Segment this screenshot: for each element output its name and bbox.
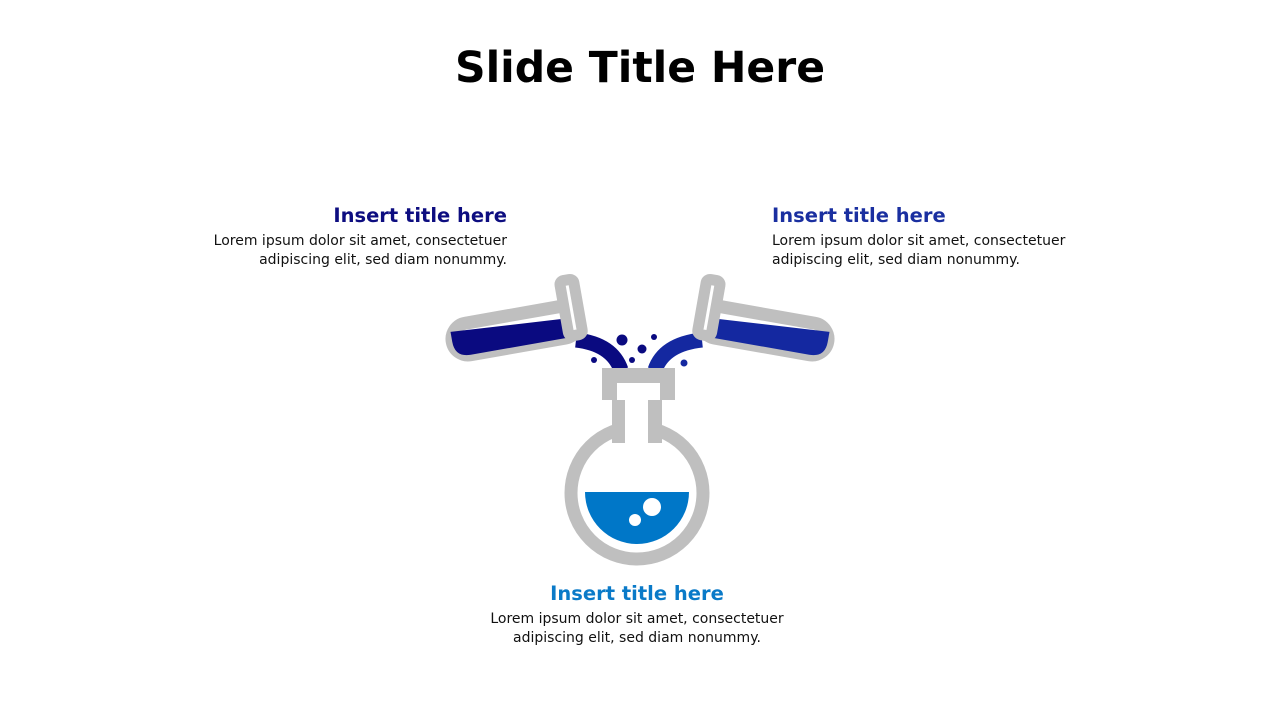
flask: [571, 368, 703, 559]
text block: right: [772, 204, 1066, 268]
text block: left: Lorem ipsum dolor sit amet, consectetuer: [214, 233, 507, 249]
text block: bottom: adipiscing elit, sed diam nonummy.: [513, 630, 761, 646]
tube: left: [445, 279, 583, 358]
text block: bottom: Lorem ipsum dolor sit amet, consectetuer: [490, 611, 784, 627]
text block: left: adipiscing elit, sed diam nonummy.: [259, 252, 507, 268]
stream: left: [576, 340, 621, 370]
text block: left: [214, 204, 507, 268]
text block: bottom: Insert title here: [550, 582, 724, 605]
text block: right: adipiscing elit, sed diam nonummy.: [772, 252, 1020, 268]
bubbles: [591, 334, 688, 366]
flask liquid: [585, 492, 689, 544]
tube: right: [697, 279, 835, 358]
text block: right: Lorem ipsum dolor sit amet, consectetuer: [772, 233, 1065, 249]
text block: bottom: [490, 582, 784, 646]
text block: left: Insert title here: [333, 204, 507, 227]
stream: right: [655, 340, 702, 370]
title: Slide Title Here: [455, 44, 825, 93]
text block: right: Insert title here: [772, 204, 946, 227]
